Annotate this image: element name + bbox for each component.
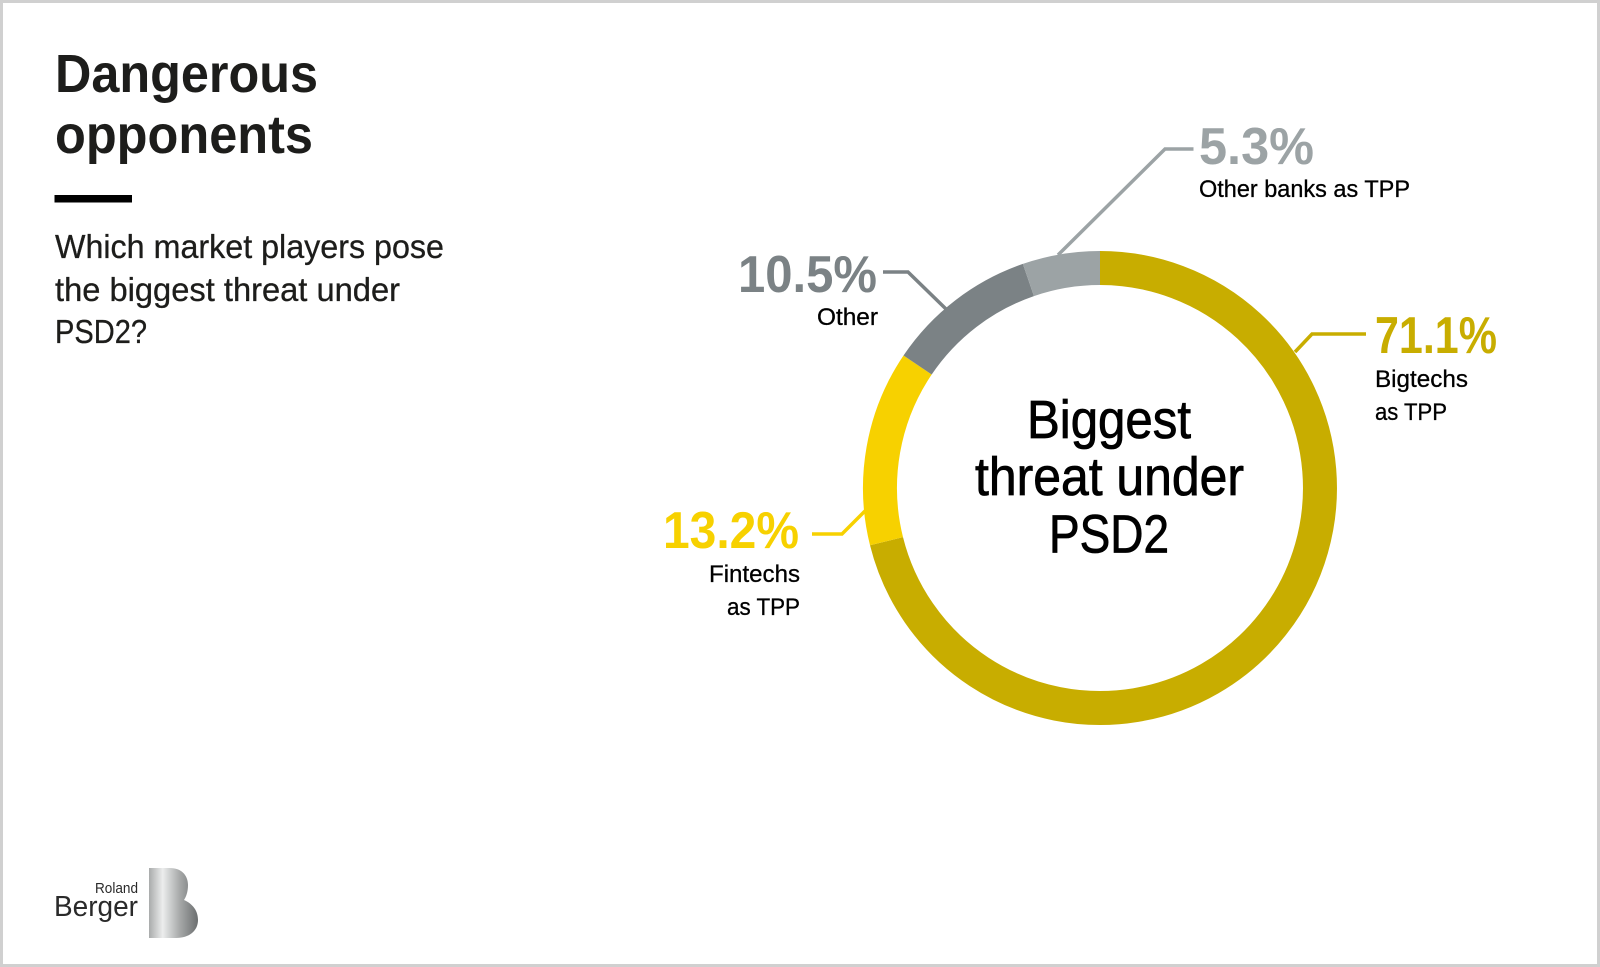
segment: other 10.5%	[918, 280, 1028, 365]
title	[55, 44, 318, 165]
title: opponents	[55, 105, 313, 165]
callout: 71.1% bigtechs: as TPP	[1375, 399, 1447, 426]
callout: 13.2% fintechs	[663, 502, 866, 621]
callout: 5.3% other banks: 5.3%	[1199, 118, 1314, 176]
callout: 71.1% bigtechs	[1295, 307, 1497, 426]
segment: bigtechs 71.1%	[886, 268, 1320, 708]
segment: other banks 5.3%	[1028, 268, 1100, 280]
logo: Roland Berger: Roland	[95, 881, 138, 897]
segment: fintechs 13.2%	[880, 365, 918, 541]
logo: Roland Berger: Berger	[54, 891, 138, 923]
subtitle: PSD2?	[55, 313, 147, 350]
callout: 10.5% other	[738, 246, 946, 331]
callout: 13.2% fintechs: as TPP	[727, 594, 800, 621]
donut centre label	[975, 390, 1244, 564]
subtitle: the biggest threat under	[55, 271, 400, 308]
callout: 10.5% other: 10.5%	[738, 246, 877, 304]
donut centre label: threat under	[975, 447, 1244, 507]
callout: 71.1% bigtechs: 71.1%	[1375, 307, 1497, 365]
callout: 13.2% fintechs: Fintechs	[709, 561, 800, 588]
subtitle: Which market players pose	[55, 228, 444, 265]
subtitle	[55, 228, 444, 350]
title rule	[54, 195, 132, 202]
callout: 10.5% other: Other	[817, 304, 878, 331]
callout: 5.3% other banks: Other banks as TPP	[1199, 176, 1410, 203]
logo: Roland Berger	[54, 868, 198, 938]
donut centre label: Biggest	[1027, 390, 1191, 450]
callout: 13.2% fintechs: 13.2%	[663, 502, 799, 560]
donut chart	[880, 268, 1320, 708]
donut centre label: PSD2	[1049, 504, 1169, 564]
callout: 5.3% other banks	[1058, 118, 1410, 255]
callout: 71.1% bigtechs: Bigtechs	[1375, 366, 1468, 393]
title: Dangerous	[55, 44, 318, 104]
